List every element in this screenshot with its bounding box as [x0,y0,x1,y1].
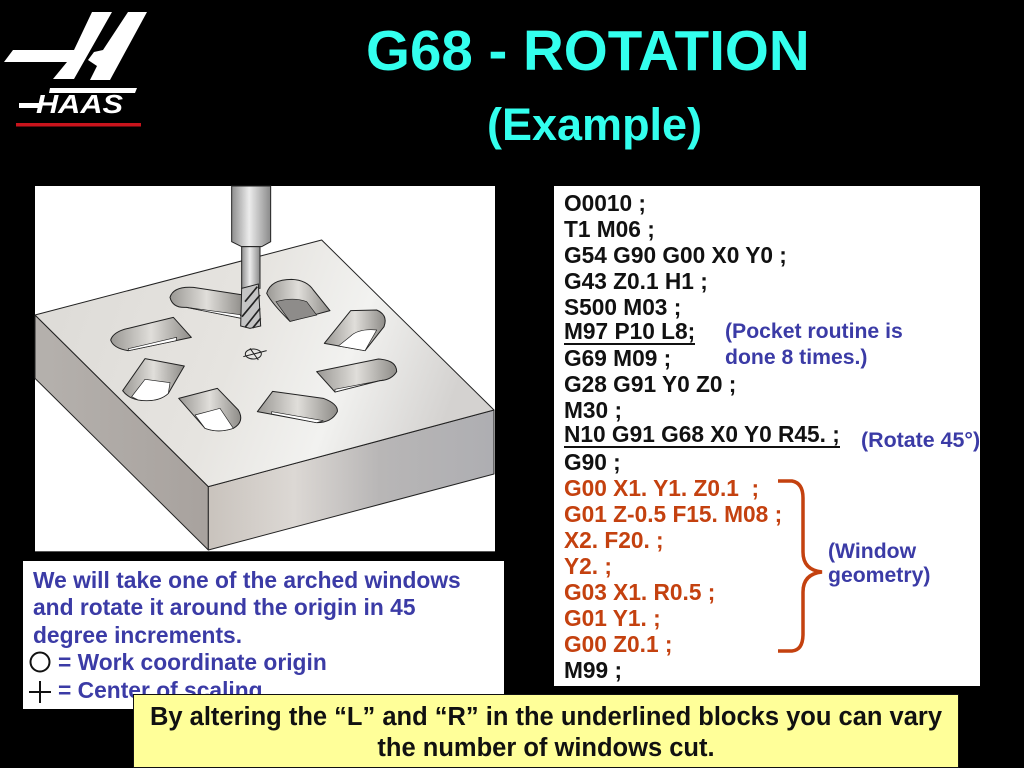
code line: G54 G90 G00 X0 Y0 ; [564,242,787,268]
annotation: window geometry [828,540,930,587]
origin mark [243,348,267,360]
tool holder [232,186,271,247]
window code line: Y2. ; [564,553,612,579]
annotation: pocket routine: done 8 times.) [725,346,867,369]
subtitle: (Example) [487,99,702,150]
annotation: pocket routine [725,320,903,369]
annotation: rotate: (Rotate 45°) [861,428,980,452]
legend: center of scaling: = Center of scaling [58,677,263,703]
pocket floor [276,299,317,321]
window code line: G00 Z0.1 ; [564,631,672,657]
code line: M30 ; [564,397,622,423]
code line: S500 M03 ; [564,294,681,320]
panel: explanation [23,561,504,709]
explanation text [33,567,461,648]
title: G68 - ROTATION [366,19,810,82]
code line: G28 G91 Y0 Z0 ; [564,371,736,397]
callout [133,694,959,768]
code line: T1 M06 ; [564,216,655,242]
code line: G69 M09 ; [564,345,671,371]
code line: G90 ; [564,449,621,475]
panel: machined part diagram [34,186,495,552]
bracket: window geometry [778,479,822,653]
window code line: X2. F20. ; [564,527,664,553]
annotation: pocket routine: (Pocket routine is [725,320,903,343]
explanation text: degree increments. [33,622,242,648]
callout: the number of windows cut. [377,734,715,762]
legend: work coordinate origin: = Work coordinate origin [58,649,327,675]
underlined code line: N10 G91 G68 X0 Y0 R45. ; [564,421,840,447]
logo: Haas: HAAS [36,89,124,119]
window code line: G01 Z-0.5 F15. M08 ; [564,501,782,527]
metal block [35,240,494,550]
arched windows [111,279,397,431]
code line: M99 ; [564,657,622,683]
panel: G-code listing [554,186,980,686]
code line: G43 Z0.1 H1 ; [564,268,708,294]
callout: By altering the “L” and “R” in the underlined blocks you can vary [150,703,942,731]
tool shank [242,247,260,288]
logo: Haas [4,12,147,126]
end mill flutes [241,284,261,328]
annotation: window geometry: geometry) [828,564,930,587]
window code line: G01 Y1. ; [564,605,661,631]
window openings showing white background [128,307,383,431]
annotation: window geometry: (Window [828,540,916,563]
explanation text: and rotate it around the origin in 45 [33,594,416,620]
window code line: G03 X1. R0.5 ; [564,579,715,605]
code line: O0010 ; [564,190,646,216]
explanation text: We will take one of the arched windows [33,567,461,593]
window code line: G00 X1. Y1. Z0.1 ; [564,475,759,501]
underlined code line: M97 P10 L8; [564,318,695,344]
image frame [35,186,495,551]
